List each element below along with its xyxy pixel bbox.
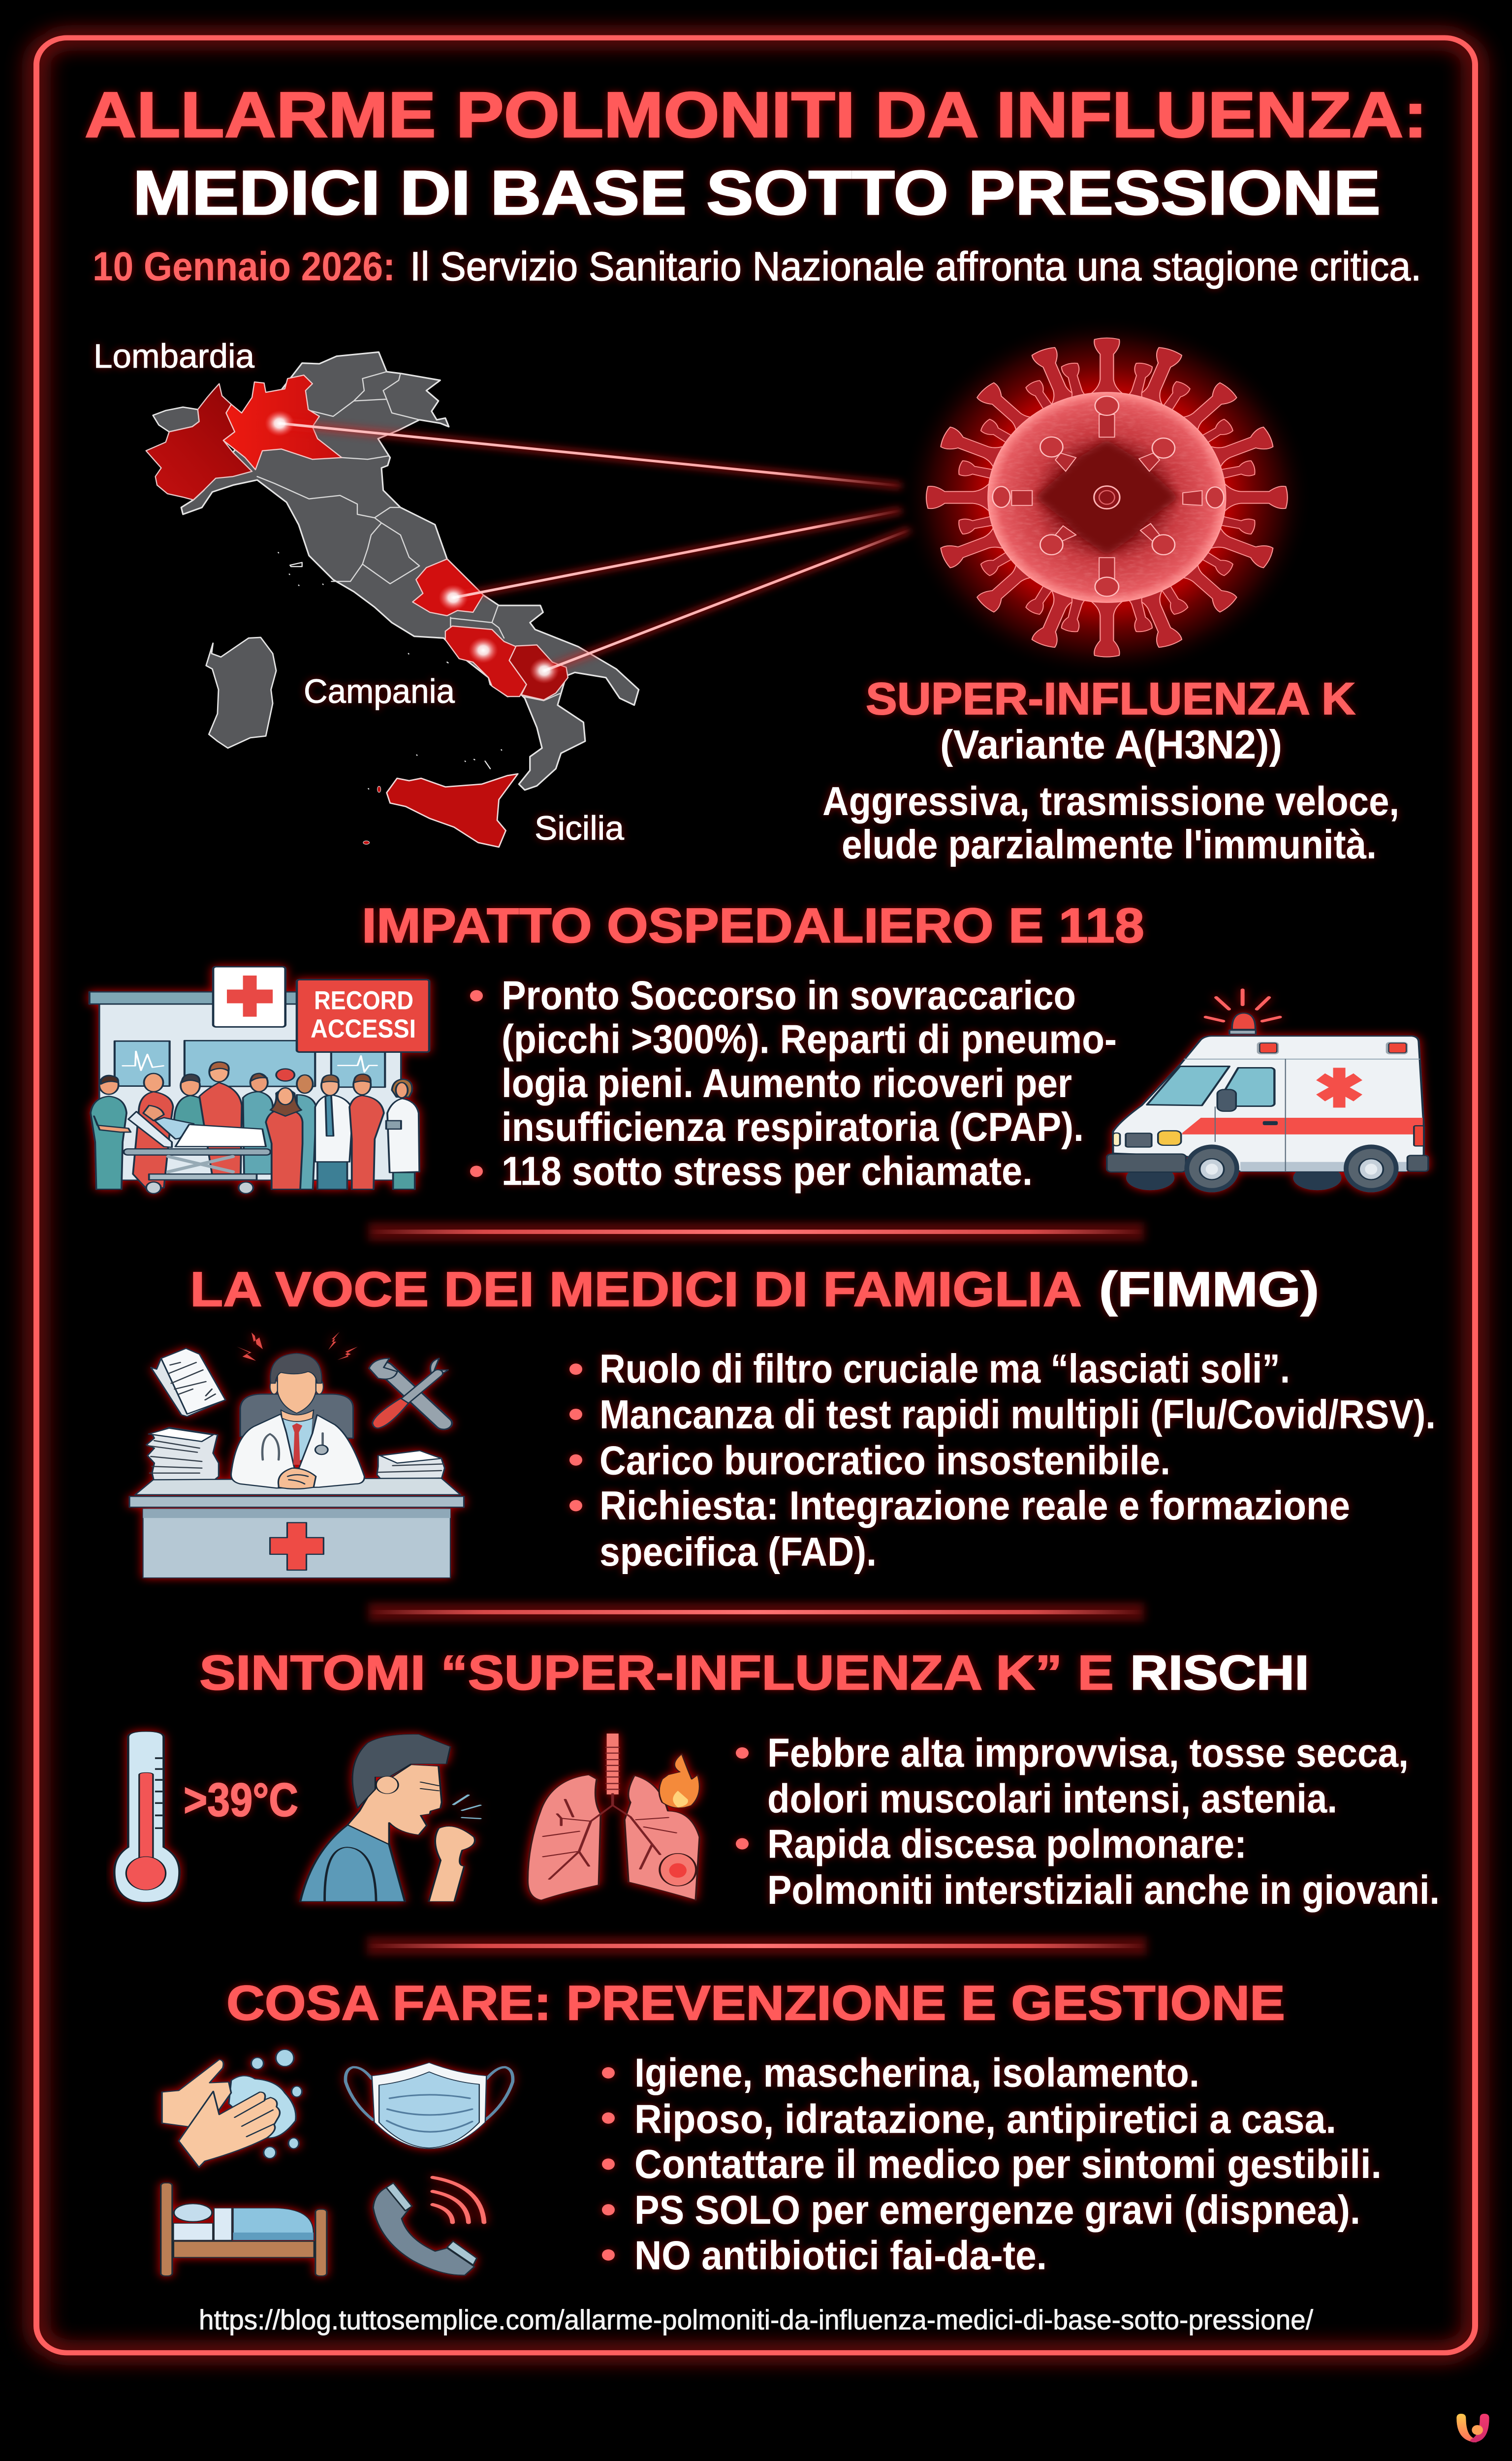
Abruzzo	[412, 559, 483, 616]
bullet list: doctors: specifica (FAD).	[599, 1529, 877, 1575]
panel: hospital impact	[90, 899, 1428, 1194]
source url: https://blog.tuttosemplice.com/allarme-polmoniti-da-influenza-medici-di-base-sotto-pressione/	[199, 2304, 1313, 2335]
heading: symptoms: SINTOMI “SUPER-INFLUENZA K” E	[199, 1646, 1114, 1700]
panel: symptoms and risks	[114, 1646, 1440, 1913]
sign text ACCESSI: ACCESSI	[311, 1014, 416, 1043]
heading: Super-Influenza K: SUPER-INFLUENZA K	[866, 673, 1355, 724]
sign text RECORD: RECORD	[314, 986, 413, 1015]
bullet list: symptoms: Rapida discesa polmonare:	[767, 1821, 1247, 1866]
virus description	[822, 673, 1399, 867]
divider 3	[367, 1936, 1147, 1956]
region borders	[257, 372, 561, 705]
description line 2: elude parzialmente l'immunità.	[842, 821, 1377, 867]
bullet list: hospital	[470, 973, 1117, 1194]
Sardegna	[206, 637, 276, 748]
temperature label: >39°C	[184, 1773, 298, 1826]
title line 2: MEDICI DI BASE SOTTO PRESSIONE	[133, 158, 1381, 228]
bullet list: prevention: Riposo, idratazione, antipiretici a casa.	[634, 2096, 1336, 2142]
heading: family doctors: LA VOCE DEI MEDICI DI FAMIGLIA	[190, 1262, 1082, 1317]
divider 2	[368, 1603, 1144, 1622]
label Sicilia: Sicilia	[535, 809, 624, 847]
icon: thermometer	[114, 1732, 180, 1902]
bullet list: hospital: (picchi >300%). Reparti di pneumo-	[502, 1016, 1117, 1062]
map hot spots	[265, 410, 559, 684]
bullet list: doctors: Carico burocratico insostenibile.	[599, 1438, 1170, 1483]
icon: virus	[908, 327, 1300, 667]
bullet list: symptoms	[736, 1730, 1440, 1913]
heading: family doctors: (FIMMG)	[1099, 1262, 1319, 1317]
icon: bed	[161, 2183, 327, 2276]
icon: ambulance	[1107, 990, 1428, 1193]
title block	[85, 79, 1427, 289]
bullet list: hospital: Pronto Soccorso in sovraccarico	[502, 973, 1076, 1018]
Sicilia	[387, 774, 518, 847]
label Campania: Campania	[304, 672, 455, 710]
heading: symptoms: RISCHI	[1130, 1646, 1309, 1700]
bullet list: doctors: Richiesta: Integrazione reale e formazione	[599, 1483, 1350, 1528]
bullet list: doctors: Ruolo di filtro cruciale ma “lasciati soli”.	[599, 1346, 1290, 1391]
panel: voice of family doctors	[129, 1262, 1436, 1578]
icon: logo	[1456, 2414, 1489, 2442]
bullet list: hospital: logia pieni. Aumento ricoveri per	[502, 1060, 1072, 1106]
icon: hospital with crowd	[90, 967, 429, 1194]
bullet list: hospital: insufficienza respiratoria (CPAP).	[502, 1104, 1084, 1150]
variant: (Variante A(H3N2))	[940, 722, 1282, 767]
Lombardia	[223, 375, 342, 470]
Campania	[445, 626, 527, 696]
Basilicata	[509, 645, 568, 700]
date: 10 Gennaio 2026:	[93, 244, 395, 289]
icon: lungs with flame	[528, 1734, 699, 1900]
small islands	[278, 552, 502, 789]
panel: what to do	[161, 1976, 1382, 2278]
bullet list: doctors	[569, 1346, 1436, 1575]
bullet list: prevention: Igiene, mascherina, isolamento.	[634, 2050, 1199, 2095]
bullet list: prevention: PS SOLO per emergenze gravi (dispnea).	[634, 2187, 1360, 2233]
title line 1: ALLARME POLMONITI DA INFLUENZA:	[85, 79, 1427, 151]
laser lines to virus	[280, 423, 911, 671]
map labels	[94, 337, 624, 847]
icon: phone	[373, 2177, 484, 2275]
icon: surgical mask	[346, 2063, 513, 2149]
heading: prevention: COSA FARE: PREVENZIONE E GESTIONE	[226, 1976, 1285, 2030]
heading: hospital impact: IMPATTO OSPEDALIERO E 118	[362, 899, 1144, 953]
label Lombardia: Lombardia	[94, 337, 254, 375]
bullet list: symptoms: dolori muscolari intensi, astenia.	[767, 1776, 1337, 1821]
bullet list: hospital: 118 sotto stress per chiamate.	[502, 1148, 1033, 1194]
mainland gray	[181, 352, 639, 790]
icon: doctor at desk	[129, 1332, 464, 1578]
divider 1	[368, 1222, 1144, 1241]
map of Italy	[146, 352, 639, 847]
Piemonte	[146, 384, 252, 500]
Valle d'Aosta	[153, 407, 199, 432]
icon: washing hands	[162, 2050, 302, 2167]
icon: coughing person	[300, 1734, 480, 1901]
bullet list: prevention: NO antibiotici fai-da-te.	[634, 2233, 1047, 2278]
bullet list: prevention	[602, 2050, 1382, 2278]
